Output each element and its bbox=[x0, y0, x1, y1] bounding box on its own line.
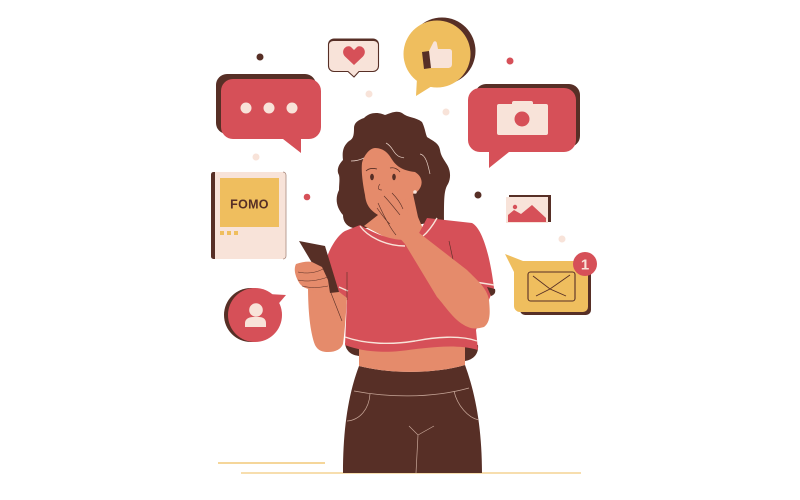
thumbs up bubble bbox=[404, 18, 476, 96]
floor lines bbox=[218, 463, 581, 473]
pants bbox=[343, 365, 482, 473]
mail bubble with badge bbox=[505, 252, 597, 315]
mail bubble with badge: 1 bbox=[581, 256, 589, 274]
profile bubble bbox=[224, 288, 286, 342]
hair bbox=[337, 112, 450, 228]
FOMO label: FOMO bbox=[230, 198, 269, 212]
shirt folds and sleeve cuff bbox=[347, 241, 454, 300]
decorative dots bbox=[252, 54, 566, 242]
facial features bbox=[366, 168, 417, 194]
face and neck bbox=[362, 148, 426, 245]
hem shadow bbox=[345, 343, 478, 361]
camera chat bubble bbox=[468, 84, 580, 168]
shirt bbox=[327, 218, 494, 352]
left arm bbox=[308, 286, 347, 352]
envelope icon bbox=[528, 272, 575, 301]
midriff bbox=[359, 345, 465, 372]
left hand finger lines bbox=[298, 269, 328, 288]
finger lines bbox=[377, 193, 403, 235]
left hand holding phone bbox=[295, 262, 330, 293]
chat bubble with three dots bbox=[216, 74, 321, 153]
collar and hem trim bbox=[339, 218, 494, 343]
notification badge bbox=[573, 252, 597, 276]
right arm and hand over mouth bbox=[377, 191, 490, 328]
photo card bbox=[506, 195, 551, 223]
woman figure bbox=[295, 112, 495, 473]
heart speech bubble bbox=[328, 39, 378, 77]
hair strands bbox=[351, 143, 430, 174]
phone bbox=[299, 241, 342, 321]
FOMO post card bbox=[211, 172, 286, 259]
